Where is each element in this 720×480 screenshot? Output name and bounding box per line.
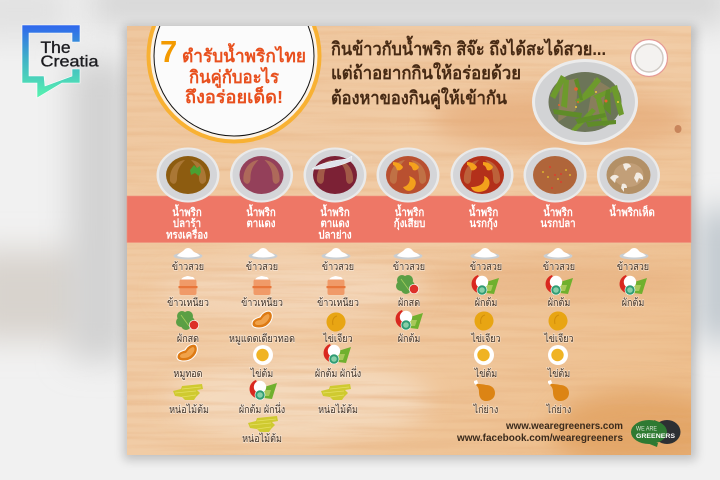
icon: omelette (474, 311, 494, 331)
icon: sticky rice (178, 276, 198, 295)
label: ข้าวสวย (617, 261, 649, 273)
title text: กินคู่กับอะไร (189, 66, 280, 89)
logo wordmark: Creatia (40, 54, 99, 70)
icon: boiled egg (253, 345, 273, 365)
label: หน่อไม้ต้ม (169, 403, 209, 416)
icon: small white plate (630, 40, 668, 76)
icon: boiled bamboo shoots (173, 384, 203, 400)
title number 7: 7 (160, 34, 177, 69)
label: ผักต้ม ผักนึ่ง (239, 402, 285, 416)
label: ข้าวสวย (470, 261, 502, 273)
name: น้ำพริก (246, 203, 276, 219)
icon: steamed rice (620, 248, 648, 260)
logo: The Creatia (22, 25, 99, 98)
label: ผักต้ม (475, 297, 497, 309)
name: น้ำพริก (543, 203, 573, 219)
name (394, 203, 426, 231)
icon: boiled bamboo shoots (248, 416, 278, 432)
label: ไข่เจียว (470, 332, 501, 345)
logo: We Are Greeners: WE ARE (636, 426, 657, 432)
icon: large bowl of green vegetables (532, 59, 638, 145)
label: หน่อไม้ต้ม (242, 432, 282, 445)
label: ข้าวเหนียว (241, 296, 283, 309)
name: น้ำพริก (469, 203, 498, 219)
label: ไข่ต้ม (474, 367, 497, 380)
bowl: nam prik ta daeng with grilled fish (304, 148, 366, 202)
headline text: ต้องหาของกินคู่ให้เข้ากัน (331, 87, 508, 110)
name: ตาแดง (321, 219, 349, 230)
icon: sticky rice (252, 276, 272, 295)
icon: fresh vegetables (176, 311, 199, 330)
icon: boiled vegetables (472, 275, 499, 295)
label: หน่อไม้ต้ม (318, 403, 358, 416)
bowl: nam prik pla ra (156, 148, 220, 202)
label: ข้าวเหนียว (317, 296, 359, 309)
icon: boiled vegetables (396, 310, 423, 330)
headline text: แต่ถ้าอยากกินให้อร่อยด้วย (331, 62, 521, 83)
logo: We Are Greeners (631, 420, 680, 447)
label: ผักต้ม (548, 297, 570, 309)
name: กุ้งเสียบ (394, 217, 426, 231)
icon: steamed rice (394, 248, 422, 260)
icon: grilled chicken (474, 380, 495, 401)
name (469, 203, 498, 231)
name (318, 203, 352, 242)
label: ผักต้ม ผักนึ่ง (315, 366, 361, 380)
logo: We Are Greeners: GREENERS (636, 433, 676, 440)
icon: omelette (326, 312, 346, 332)
label: ผักสด (177, 333, 199, 345)
label: ไก่ย่าง (473, 403, 499, 416)
icon: fresh vegetables (396, 275, 419, 294)
icon: boiled vegetables (620, 275, 647, 295)
label: ข้าวสวย (543, 261, 575, 273)
label: ข้าวสวย (246, 261, 278, 273)
icon: boiled egg (474, 345, 494, 365)
name: ปลาย่าง (318, 229, 352, 242)
name: น้ำพริก (172, 203, 202, 219)
label: หมูทอด (173, 368, 203, 380)
column 5: nam prik narok kung (469, 203, 502, 416)
logo wordmark: The (40, 39, 70, 57)
label: ผักต้ม (622, 297, 644, 309)
bowl: nam prik het (597, 148, 660, 202)
footer links: www.wearegreeners.com (505, 420, 623, 432)
label: ไข่เจียว (322, 332, 353, 345)
label: ข้าวเหนียว (167, 296, 209, 309)
icon: steamed rice (248, 248, 278, 260)
icon: boiled vegetables (546, 275, 573, 295)
headline text (331, 35, 606, 110)
title text: ถึงอร่อยเด็ด! (185, 85, 283, 107)
band: sauce names background (127, 196, 691, 242)
name: น้ำพริก (395, 203, 424, 219)
title text: ตำรับน้ำพริกไทย (182, 43, 306, 66)
bowl: nam prik kung siap (376, 148, 440, 202)
name (166, 203, 208, 242)
label: ข้าวสวย (172, 261, 204, 273)
label: ไข่ต้ม (250, 367, 273, 380)
bowl: nam prik narok kung (450, 148, 514, 202)
icon: fried pork (252, 311, 272, 328)
label: ไข่เจียว (543, 332, 574, 345)
title text (182, 43, 306, 107)
label: ไข่ต้ม (547, 367, 570, 380)
label: ผักสด (398, 297, 420, 309)
column 4: nam prik kung siap (393, 203, 426, 345)
footer links: www.facebook.com/wearegreeners (456, 432, 623, 444)
wood background (127, 26, 720, 470)
icon: fried pork (177, 344, 197, 361)
label: ข้าวสวย (393, 261, 425, 273)
icon: steamed rice (174, 248, 202, 260)
label: หมูแดดเดียวทอด (229, 332, 295, 345)
footer links (456, 420, 623, 444)
label: ไก่ย่าง (546, 403, 572, 416)
bowl: nam prik narok pla (524, 148, 586, 202)
icon: boiled egg (548, 345, 568, 365)
column 1: nam prik pla ra song khrueang (166, 203, 209, 416)
icon: steamed rice (544, 248, 572, 260)
name: ปลาร้า (173, 217, 201, 230)
column 2: nam prik ta daeng (229, 203, 295, 445)
column 6: nam prik narok pla (540, 203, 576, 416)
name: น้ำพริก (320, 203, 350, 219)
icon: sticky rice (326, 276, 346, 295)
name: ทรงเครื่อง (166, 227, 208, 242)
headline text: กินข้าวกับน้ำพริก สิจ๊ะ ถึงได้สะได้สวย... (331, 35, 606, 59)
icon: grilled chicken (548, 380, 569, 401)
icon: boiled bamboo shoots (321, 384, 351, 400)
icon: boiled vegetables (324, 344, 351, 364)
label: ผักต้ม (398, 333, 420, 345)
name: นรกกุ้ง (469, 217, 498, 231)
title badge (146, 26, 322, 144)
name: นรกปลา (540, 217, 576, 230)
name: น้ำพริกเห็ด (609, 203, 655, 219)
logo wordmark (40, 39, 99, 70)
column 3: nam prik ta daeng pla yang (315, 203, 361, 416)
icon: boiled vegetables (250, 380, 277, 400)
label: ข้าวสวย (322, 261, 354, 273)
icon: omelette (548, 311, 568, 331)
bowl: nam prik ta daeng (230, 148, 293, 202)
name (246, 203, 276, 230)
column 7: nam prik het (609, 203, 655, 309)
icon: steamed rice (470, 248, 500, 260)
name (540, 203, 576, 230)
icon: steamed rice (322, 248, 350, 260)
name: ตาแดง (247, 219, 275, 230)
